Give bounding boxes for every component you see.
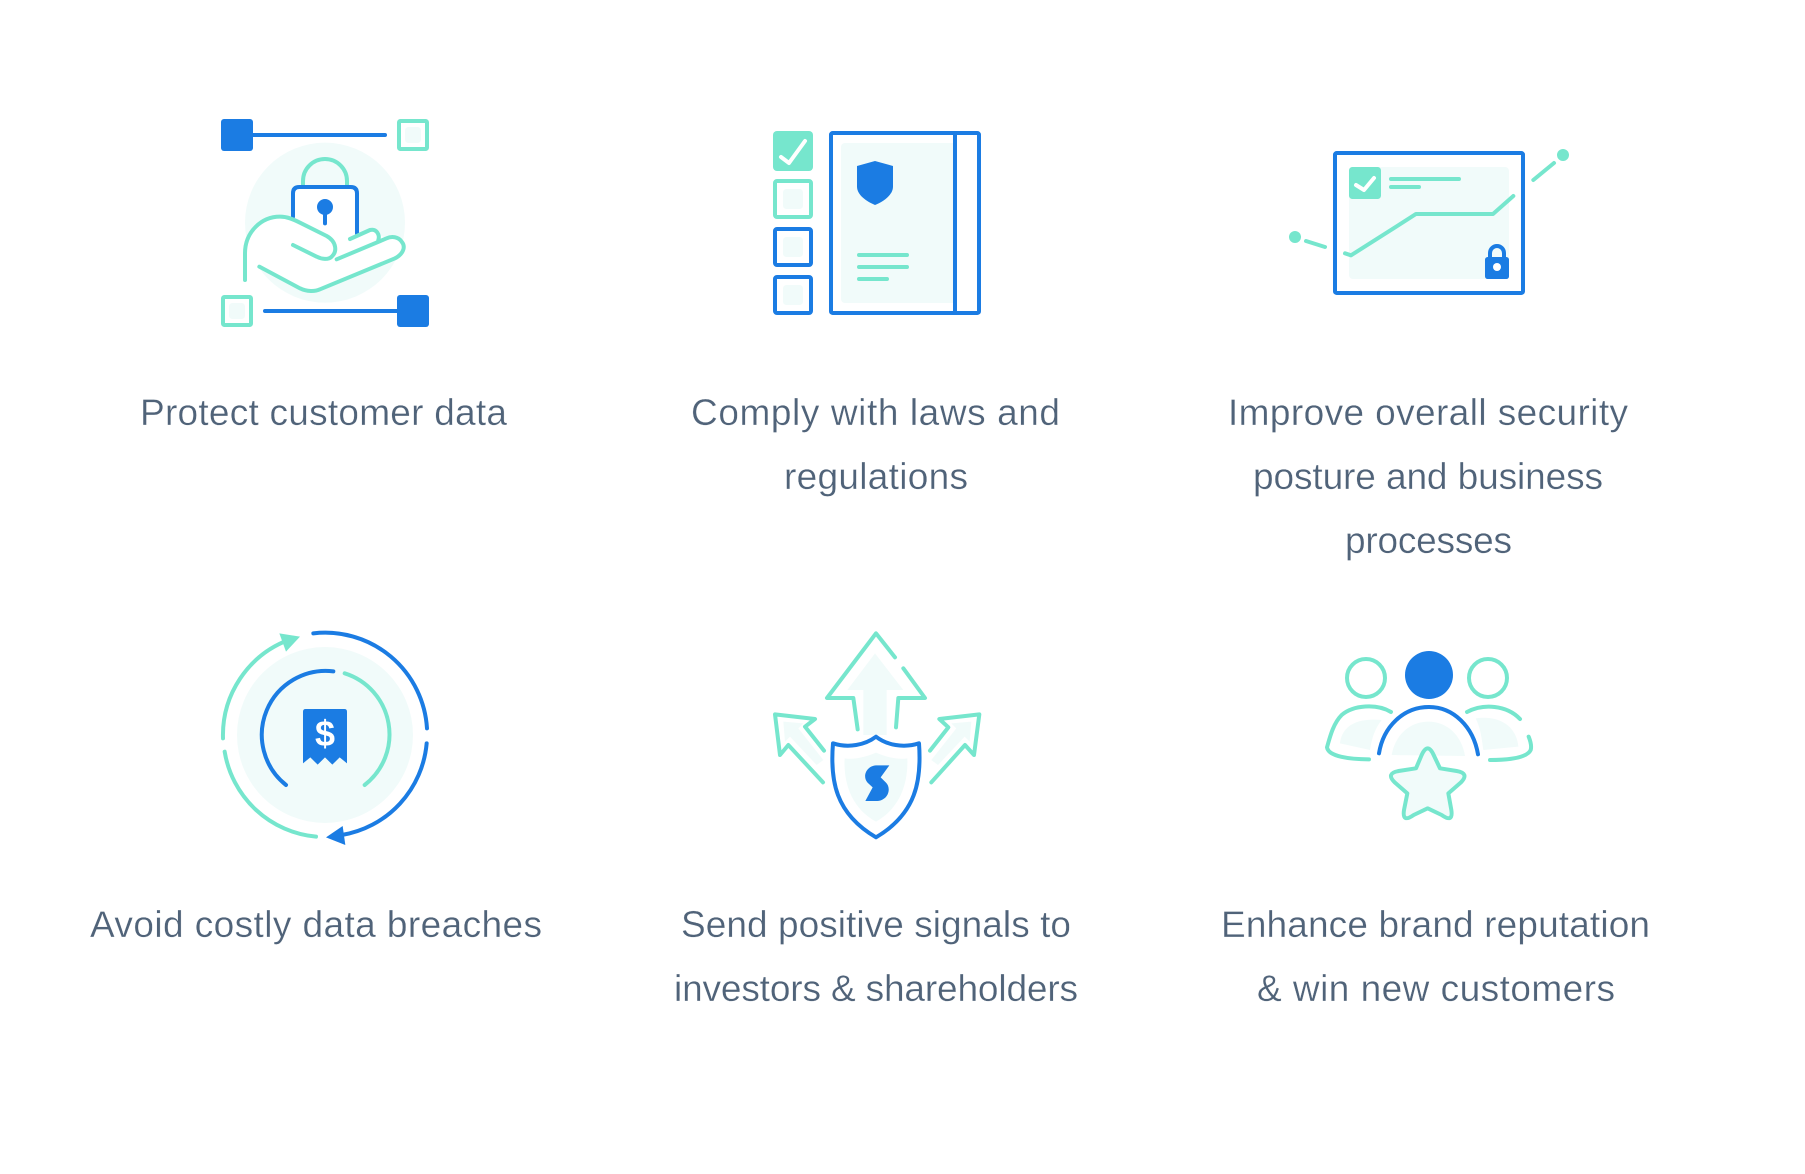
icon: circular arrows around receipt [223, 633, 427, 845]
icon: three people and a star [1327, 651, 1531, 818]
label: comply with laws and regulations [691, 392, 1060, 497]
panel: improve overall security posture [1228, 149, 1628, 561]
panel: comply with laws and regulations [691, 131, 1060, 497]
label: comply with laws and regulations: regulations [784, 456, 968, 497]
label: enhance brand reputation and win new customers: Enhance brand reputation [1221, 904, 1650, 945]
label: improve overall security posture and business processes: posture and business [1253, 456, 1603, 497]
label: improve overall security posture and business processes [1228, 392, 1628, 561]
label: enhance brand reputation and win new customers: & win new customers [1257, 968, 1615, 1009]
icon: circular arrows around receipt: $ [315, 713, 335, 754]
label: send positive signals to investors and shareholders [674, 904, 1078, 1009]
label: send positive signals to investors and shareholders: Send positive signals to [681, 904, 1071, 945]
icon: checklist and policy document [773, 131, 979, 313]
panel: send positive signals to investors [674, 633, 1078, 1009]
panel: enhance brand reputation [1221, 651, 1650, 1009]
label: send positive signals to investors and shareholders: investors & shareholders [674, 968, 1078, 1009]
icon: secure dashboard with rising line [1289, 149, 1569, 293]
label: enhance brand reputation and win new customers [1221, 904, 1650, 1009]
label: comply with laws and regulations: Comply with laws and [691, 392, 1060, 433]
panel: protect customer data [140, 119, 507, 433]
label: protect customer data: Protect customer data [140, 392, 507, 433]
icon: shield with outward arrows [775, 633, 979, 837]
label: avoid costly data breaches: Avoid costly data breaches [90, 904, 542, 945]
icon: hand holding padlock [221, 119, 429, 327]
label: improve overall security posture and business processes: processes [1345, 520, 1512, 561]
panel: avoid costly data breaches [90, 633, 542, 945]
label: improve overall security posture and business processes: Improve overall security [1228, 392, 1628, 433]
